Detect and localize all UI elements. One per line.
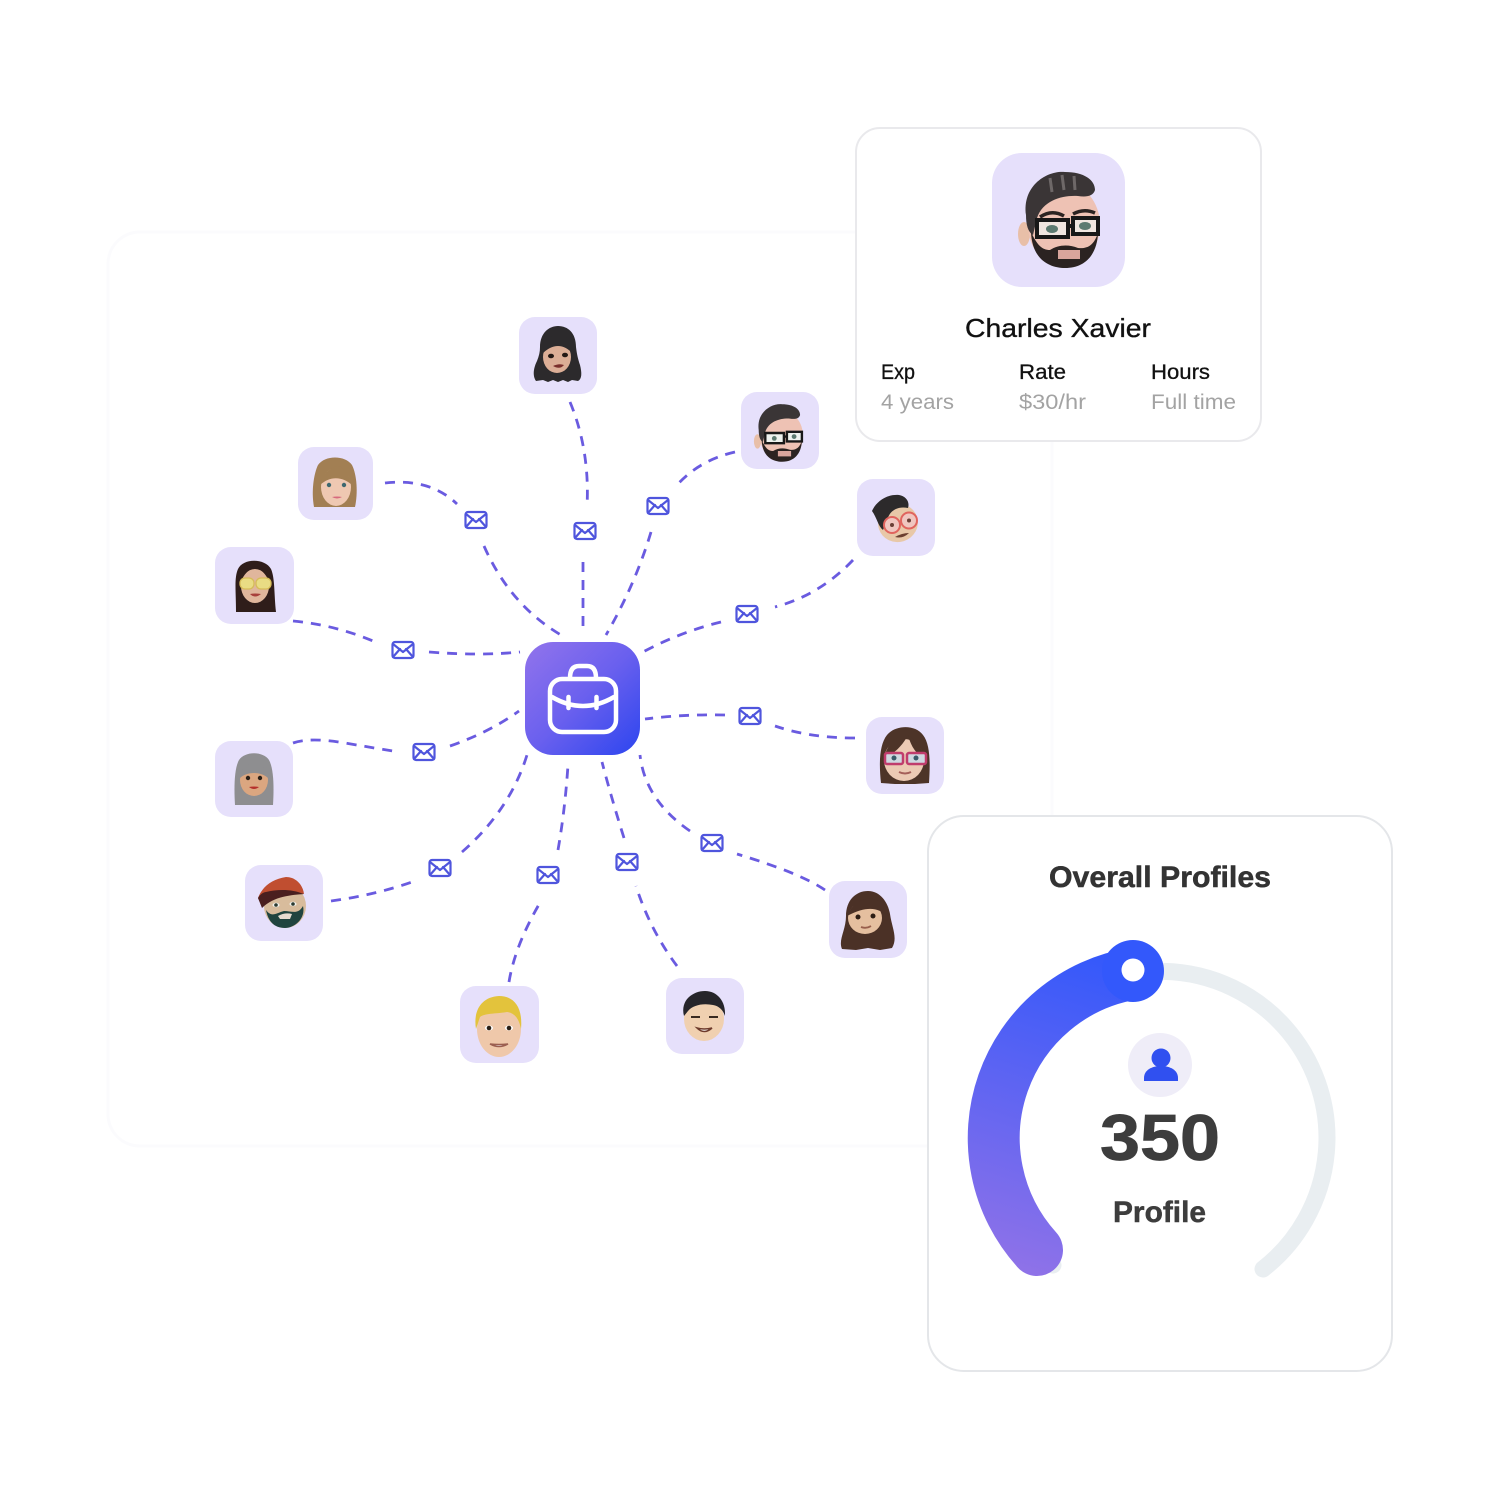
avatar: man with red cap and green beard [245,865,323,941]
value: 350 [1100,1101,1220,1174]
network diagram [215,317,944,1063]
stat: rate [1019,361,1086,414]
stat: experience: Exp [881,361,915,384]
stat: rate: Rate [1019,361,1066,384]
avatar: bearded man with glasses (small) [741,392,819,469]
gauge chart [994,940,1327,1269]
name: Charles Xavier [965,313,1151,343]
avatar: woman with long grey hair [215,741,293,817]
stat: hours [1151,361,1236,414]
avatar: woman with red glasses [866,717,944,794]
stat: experience: 4 years [881,391,954,414]
overall profiles card [928,816,1392,1371]
avatar: woman with black hair and fringe [519,317,597,394]
profile photo: Charles Xavier [992,153,1125,287]
avatar: woman with long brown hair [829,881,907,958]
avatar: woman with gold sunglasses [215,547,294,624]
avatar: woman with blonde bob [298,447,373,520]
dashed connectors [293,402,855,982]
card heading: Overall Profiles [1049,861,1271,894]
avatar: smiling man with black hair [666,978,744,1054]
envelope icons [392,498,760,883]
central briefcase hub [525,642,640,755]
icon: person [1128,1033,1192,1097]
profile card [856,128,1261,441]
avatar: blond man [460,986,539,1063]
stat: rate: $30/hr [1019,391,1086,414]
value label: Profile [1113,1196,1206,1229]
stat: hours: Full time [1151,391,1236,414]
avatar: man with red round glasses [857,479,935,556]
stat: experience [881,361,954,414]
background panel [108,232,1052,1146]
stat: hours: Hours [1151,361,1210,384]
